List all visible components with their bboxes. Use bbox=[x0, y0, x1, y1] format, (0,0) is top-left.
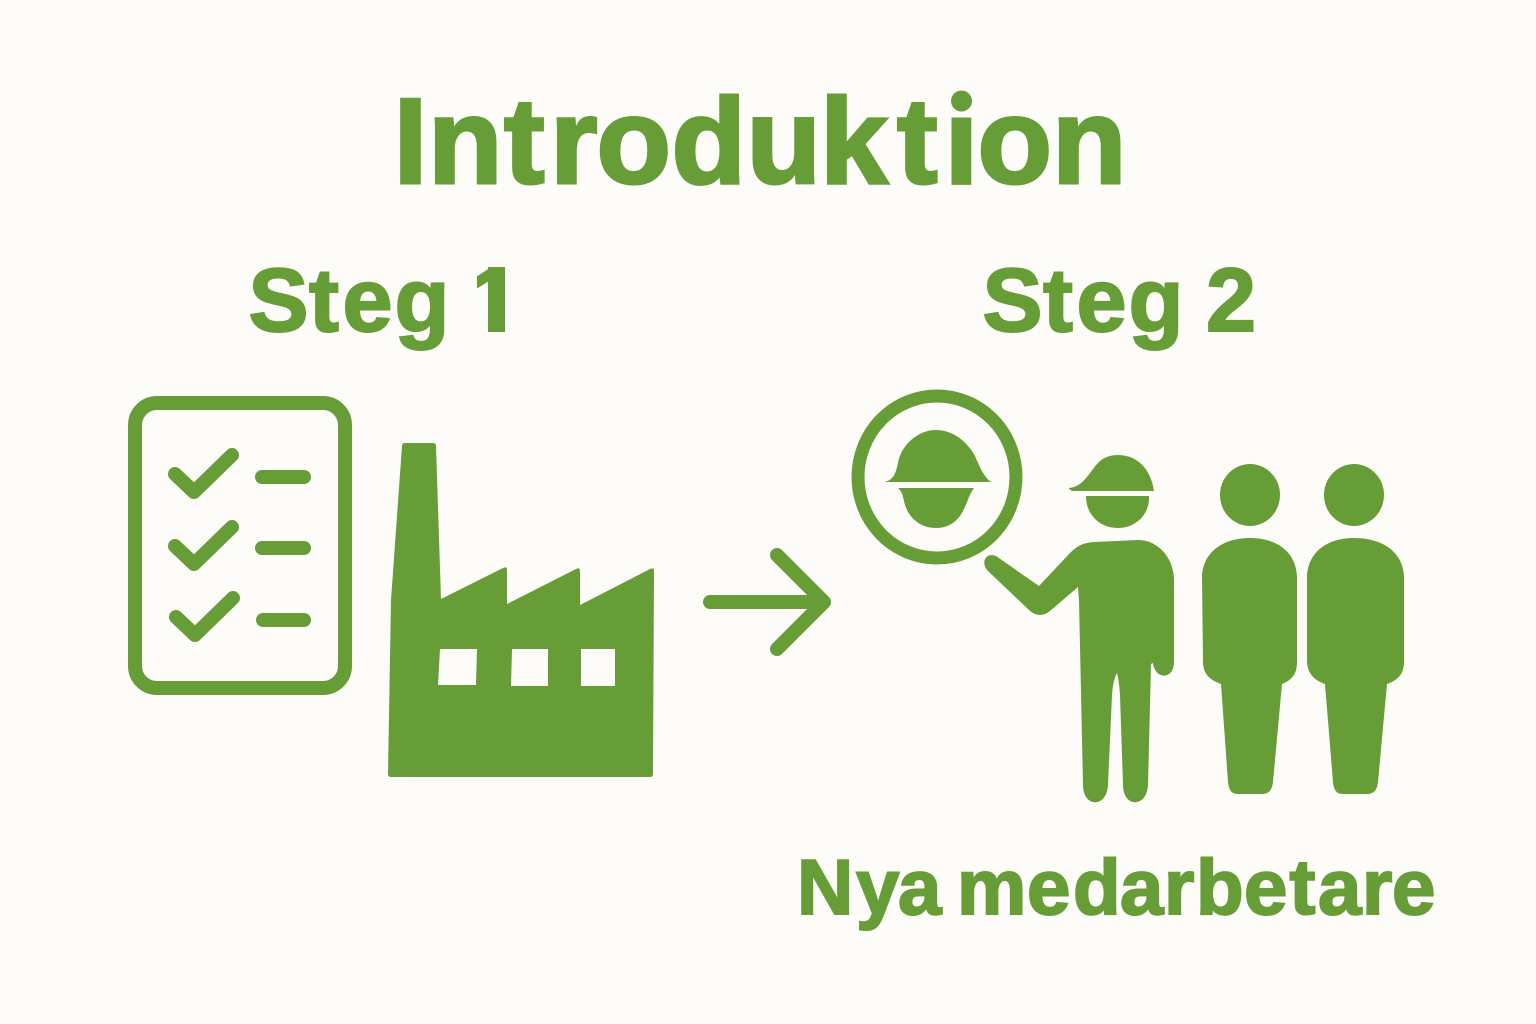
arrow bbox=[710, 555, 824, 649]
icon: instructor with helmet bbox=[984, 455, 1174, 802]
title: Introduktion bbox=[394, 73, 1127, 209]
icon: factory bbox=[388, 443, 654, 777]
label: Nya medarbetare: Nya medarbetare bbox=[797, 843, 1435, 931]
heading: Steg 1: Steg 1 bbox=[248, 251, 519, 351]
icon: new employee 2 bbox=[1307, 464, 1404, 794]
icon: checklist bbox=[135, 403, 345, 688]
heading: Steg 2: Steg 2 bbox=[982, 251, 1256, 351]
icon: magnifier with helmet bbox=[858, 396, 1016, 558]
icon: new employee 1 bbox=[1202, 464, 1297, 794]
